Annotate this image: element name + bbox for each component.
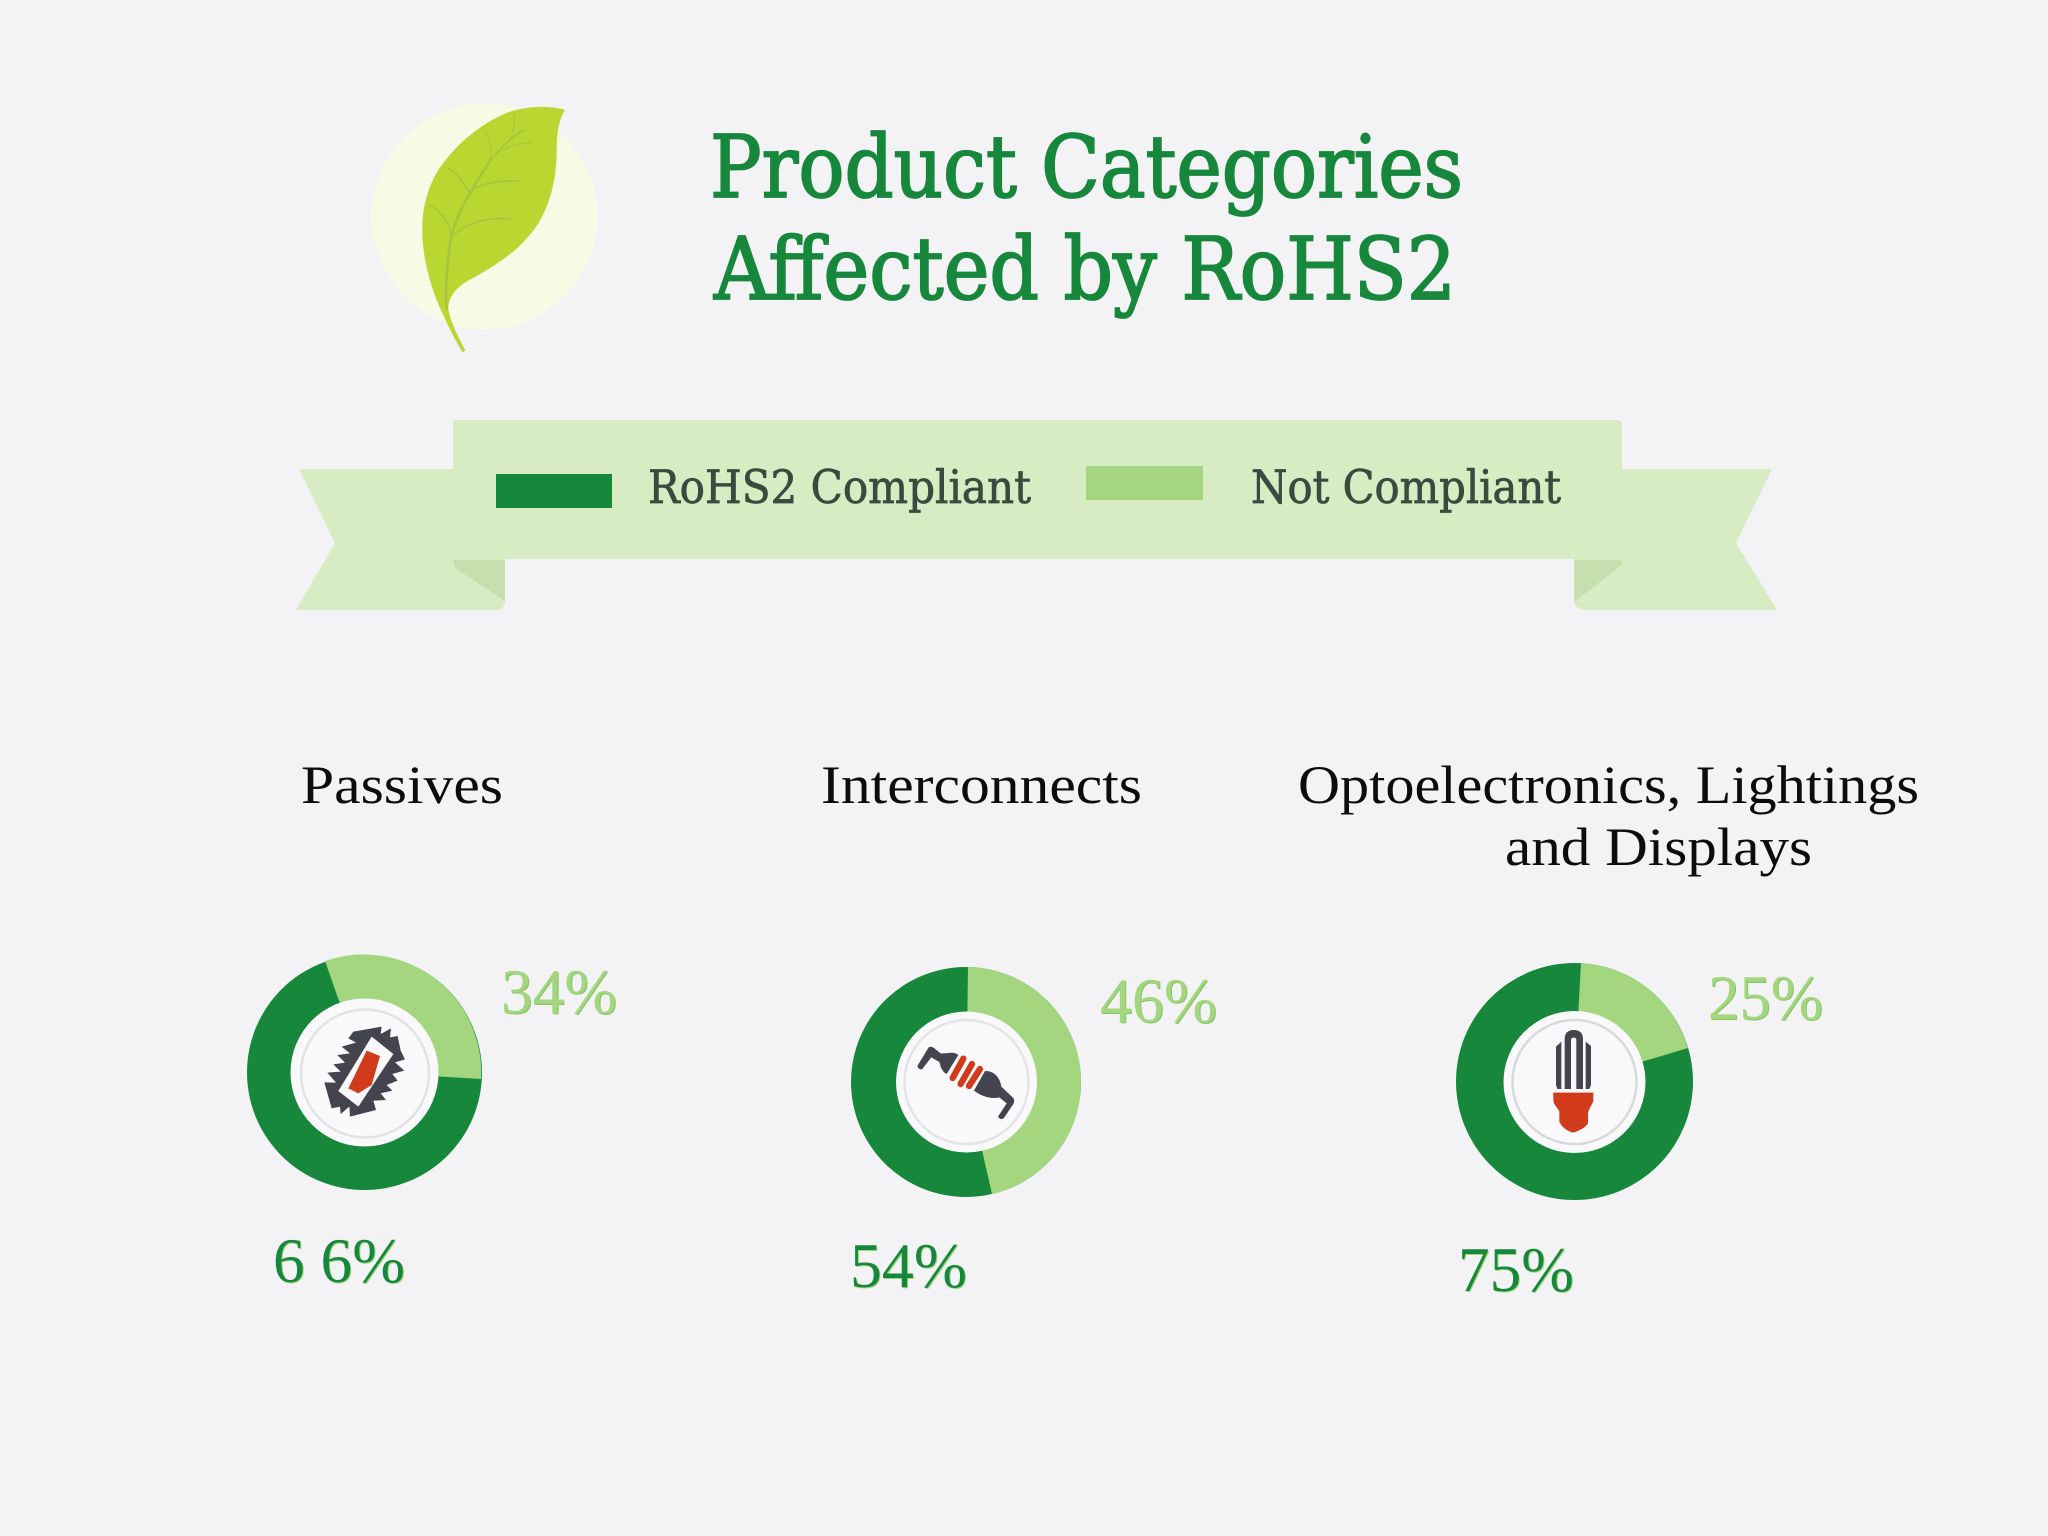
value: 46%: 46% (1100, 966, 1217, 1036)
title (710, 118, 1463, 320)
panel: passives donut (247, 954, 482, 1190)
ribbon left fold (453, 560, 505, 601)
legend ribbon (296, 420, 1777, 610)
heading: Optoelectronics, Lightings and Displays (1298, 755, 1919, 877)
icon: bulb (1553, 1030, 1593, 1133)
heading: Optoelectronics, Lightings and Displays: and Displays (1505, 817, 1812, 877)
donut compliant ring (247, 955, 482, 1190)
donut compliant ring (851, 967, 1081, 1197)
donut not compliant segment (325, 954, 481, 1079)
heading: Interconnects: Interconnects (821, 755, 1142, 815)
ribbon main band (453, 420, 1622, 559)
icon: resistor (917, 1047, 1014, 1119)
icon: leaf with halo (372, 104, 598, 352)
legend label: not compliant: Not Compliant (1251, 460, 1561, 514)
ribbon left tail (296, 469, 505, 610)
legend swatch: not compliant (1086, 466, 1203, 500)
legend swatch: compliant (496, 474, 612, 508)
value: 66%: 6 6% (273, 1226, 405, 1296)
donut not compliant segment (1574, 963, 1688, 1082)
value: 34%: 34% (501, 957, 617, 1027)
icon: chip (324, 1027, 405, 1117)
heading: Optoelectronics, Lightings and Displays: Optoelectronics, Lightings (1298, 755, 1919, 815)
ribbon right tail (1574, 469, 1777, 610)
heading: Passives: Passives (301, 755, 503, 815)
donut not compliant segment (966, 967, 1081, 1194)
panel: interconnects donut (851, 967, 1081, 1197)
legend label: compliant: RoHS2 Compliant (648, 460, 1031, 514)
value: 54%: 54% (850, 1231, 967, 1301)
title: Affected by RoHS2 (713, 220, 1456, 320)
panel: optoelectronics donut (1456, 963, 1693, 1200)
ribbon right fold (1574, 560, 1622, 602)
title: Product Categories (710, 118, 1463, 218)
value: 75%: 75% (1458, 1235, 1574, 1305)
donut compliant ring (1456, 963, 1693, 1200)
value: 25%: 25% (1708, 963, 1823, 1033)
